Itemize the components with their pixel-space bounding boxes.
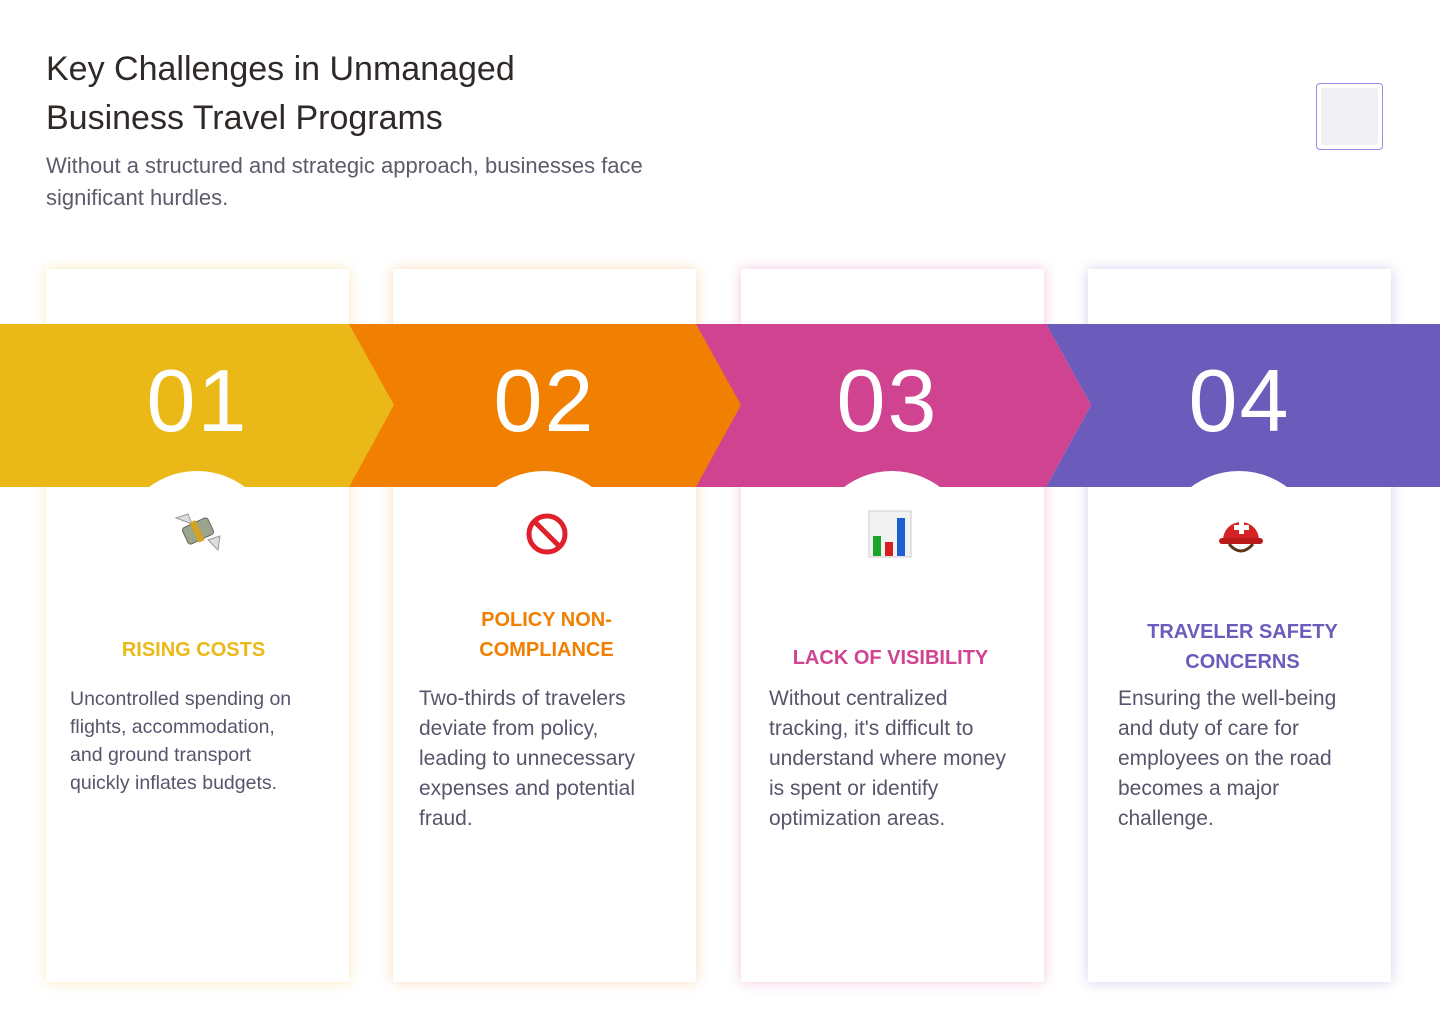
card 2 body: leading to unnecessary: [419, 747, 635, 770]
circle 2: [464, 471, 624, 631]
subtitle: significant hurdles.: [46, 185, 228, 210]
card 2 title: [479, 609, 614, 661]
card 3 body: understand where money: [769, 747, 1006, 770]
card 2 title: COMPLIANCE: [479, 639, 614, 661]
number 01: 01: [147, 351, 248, 450]
card 4 body: Ensuring the well-being: [1118, 687, 1336, 710]
card 4 background: [1088, 269, 1391, 982]
card 2 body: deviate from policy,: [419, 717, 598, 740]
card 3 body: tracking, it's difficult to: [769, 717, 973, 740]
card 1 body: quickly inflates budgets.: [70, 772, 277, 794]
card 2 body: expenses and potential: [419, 777, 635, 800]
number 03: 03: [837, 351, 938, 450]
card 1 body: and ground transport: [70, 744, 251, 766]
card 1 title: RISING COSTS: [122, 639, 265, 661]
card 3 background: [741, 269, 1044, 982]
circle 3: [812, 471, 972, 631]
subtitle: Without a structured and strategic approach, businesses face: [46, 153, 643, 178]
card 2 body: Two-thirds of travelers: [419, 687, 626, 710]
card 2 title: POLICY NON-: [481, 609, 612, 631]
number 02: 02: [494, 351, 595, 450]
card 1 body: flights, accommodation,: [70, 716, 275, 738]
card 2 body: fraud.: [419, 807, 473, 830]
icon: placeholder image top right: [1316, 83, 1383, 150]
card 1 background: [46, 269, 349, 982]
card 3 body: is spent or identify: [769, 777, 938, 800]
title: [46, 50, 515, 137]
icon: rescue helmet: [1219, 522, 1263, 552]
card 3 body: Without centralized: [769, 687, 948, 710]
card 4 body: challenge.: [1118, 807, 1214, 830]
card 2 background: [393, 269, 696, 982]
icon: flying money: [174, 513, 221, 551]
chevron band: [0, 324, 1440, 487]
card 1 body: Uncontrolled spending on: [70, 688, 291, 710]
card 3 title: LACK OF VISIBILITY: [793, 647, 988, 669]
title: Key Challenges in Unmanaged: [46, 50, 515, 88]
card 4 title: CONCERNS: [1185, 651, 1300, 673]
card 3 body: [769, 687, 1006, 830]
number 04: 04: [1189, 351, 1290, 450]
subtitle: [46, 153, 643, 210]
card 4 body: and duty of care for: [1118, 717, 1299, 740]
card 2 body: [419, 687, 635, 830]
icon: bar chart: [868, 510, 912, 558]
card 1 body: [70, 688, 291, 794]
title: Business Travel Programs: [46, 99, 443, 137]
card 4 body: [1118, 687, 1336, 830]
circle 1: [117, 471, 277, 631]
card 4 title: [1147, 621, 1338, 673]
card 4 title: TRAVELER SAFETY: [1147, 621, 1338, 643]
circle 4: [1159, 471, 1319, 631]
icon: prohibited: [526, 514, 568, 554]
card 4 body: employees on the road: [1118, 747, 1332, 770]
card 4 body: becomes a major: [1118, 777, 1279, 800]
card 3 body: optimization areas.: [769, 807, 945, 830]
